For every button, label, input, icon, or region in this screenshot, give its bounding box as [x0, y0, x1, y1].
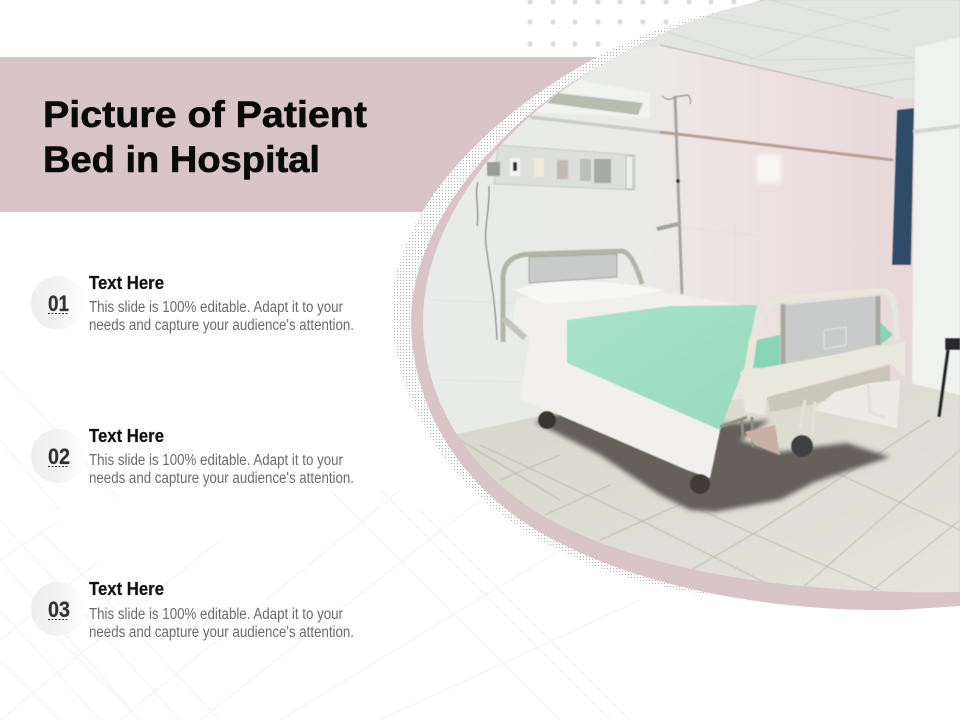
item 01 text [89, 272, 354, 334]
item 01 text: Text Here [89, 272, 164, 293]
item 01 text: needs and capture your audience's attention. [89, 317, 354, 334]
foot panel [785, 296, 877, 366]
number badge 01: 01 [48, 291, 69, 316]
item 03 text: needs and capture your audience's attention. [89, 624, 354, 641]
item 02 text [89, 425, 354, 487]
number badge 03 [31, 582, 85, 636]
item 03 text: Text Here [89, 578, 164, 599]
head frame [503, 251, 642, 342]
title: Picture of Patient [43, 94, 367, 135]
green blanket [567, 305, 757, 430]
item 03 text [89, 578, 354, 641]
pillow [516, 281, 662, 298]
wall glare [757, 155, 781, 183]
foot base [740, 342, 905, 415]
foot frame [746, 288, 900, 356]
item 03 text: This slide is 100% editable. Adapt it to your [89, 606, 343, 623]
item 02 text: needs and capture your audience's attention. [89, 470, 354, 487]
ceiling tile lines [752, 20, 914, 87]
underside metal [720, 417, 753, 447]
head panel [529, 254, 617, 283]
chair [939, 338, 960, 417]
photo: hospital room with patient bed [400, 0, 960, 620]
hanging cloth [813, 380, 900, 428]
white sheet [516, 296, 738, 479]
bed shadow [535, 410, 890, 512]
background line pattern [0, 370, 640, 720]
item 02 text: This slide is 100% editable. Adapt it to your [89, 452, 343, 469]
floor tile grout lines [460, 420, 960, 600]
foot mechanism [767, 365, 890, 412]
dotted halo behind photo [392, 0, 960, 600]
wall strip [530, 117, 675, 134]
pillar strip [913, 126, 960, 132]
pillar [912, 37, 960, 395]
wall cord [477, 182, 497, 340]
floor reflection [745, 425, 780, 455]
item 02 [31, 425, 354, 487]
floor [457, 384, 960, 592]
front left wheel [690, 474, 710, 494]
crank handles [802, 385, 885, 419]
curtain [892, 108, 914, 265]
number badge 02 [31, 429, 85, 483]
header band [0, 57, 600, 212]
wall [423, 44, 914, 434]
item 01 [31, 272, 354, 334]
bed side rail [503, 318, 525, 338]
item 02 text: Text Here [89, 425, 164, 446]
number badge 01 [31, 276, 85, 330]
wall ceiling junction [660, 45, 893, 98]
pink ring around photo [411, 0, 960, 610]
wall service panel [487, 145, 635, 190]
light fixture [547, 92, 649, 117]
title [43, 94, 367, 180]
ceiling [642, 0, 960, 98]
wall tile lines [734, 232, 736, 234]
dot grid decoration [527, 0, 737, 47]
IV pole [657, 95, 691, 294]
number badge 03: 03 [48, 597, 70, 622]
copper strip [660, 132, 893, 160]
back wheel [538, 411, 556, 429]
number badge 02: 02 [48, 444, 70, 469]
title: Bed in Hospital [43, 139, 320, 180]
bed [503, 251, 905, 494]
green mattress side [753, 320, 893, 368]
front right wheel [791, 435, 813, 457]
item 03 [31, 578, 354, 641]
item 01 text: This slide is 100% editable. Adapt it to your [89, 299, 343, 316]
